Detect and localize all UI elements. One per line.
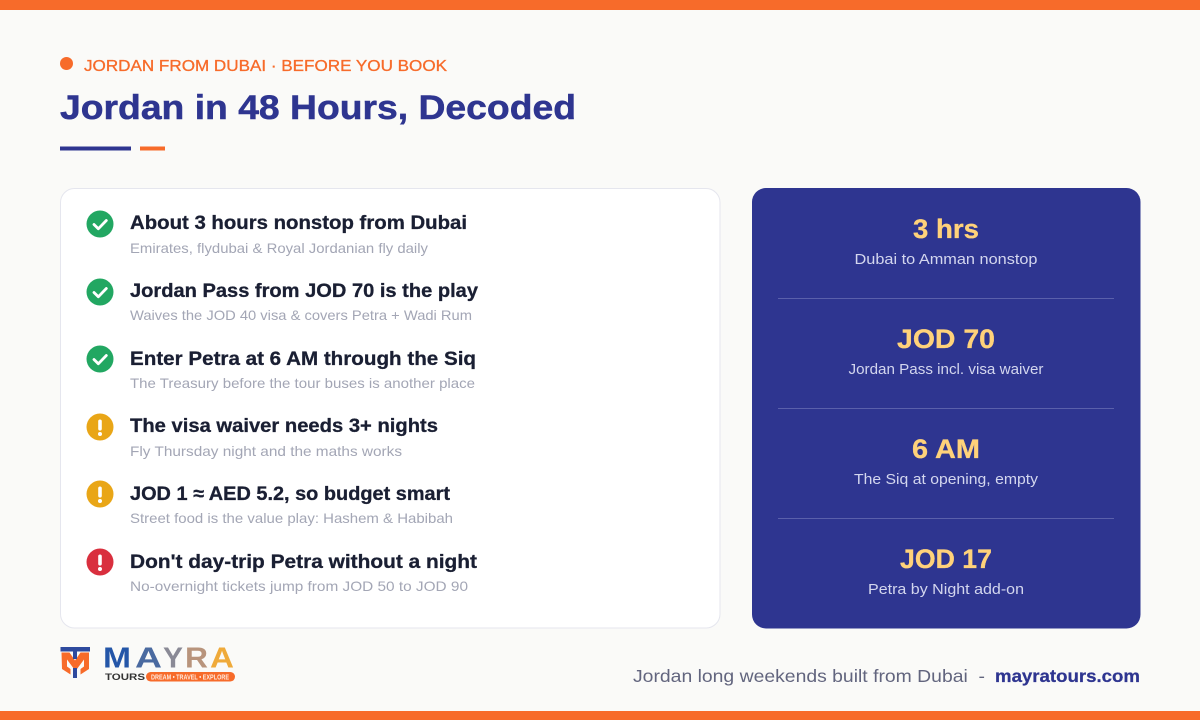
stat: 3 hrs	[854, 214, 1038, 268]
stat: 3 hrs: 3 hrs	[913, 214, 979, 244]
stat: 6 AM: 6 AM	[912, 434, 980, 464]
item: enter petra	[86, 346, 476, 391]
item: budget: JOD 1 ≈ AED 5.2, so budget smart	[130, 483, 451, 505]
item: about 3 hours	[86, 210, 467, 256]
stat: JOD 70: Jordan Pass incl. visa waiver	[848, 362, 1044, 378]
stat: JOD 17: JOD 17	[900, 544, 992, 574]
title: Jordan in 48 Hours, Decoded	[60, 89, 576, 127]
stat: 6 AM: The Siq at opening, empty	[854, 472, 1039, 488]
item: about 3 hours: Emirates, flydubai & Royal Jordanian fly daily	[130, 240, 428, 256]
item: visa waiver: The visa waiver needs 3+ nights	[130, 415, 438, 437]
stat: 6 AM	[854, 434, 1039, 488]
item: enter petra: The Treasury before the tour buses is another place	[130, 375, 475, 391]
item: jordan pass	[86, 278, 478, 323]
panel: checklist	[60, 188, 720, 628]
item: budget	[86, 480, 453, 526]
item: budget: Street food is the value play: Hashem & Habibah	[130, 510, 453, 526]
item: enter petra: Enter Petra at 6 AM through the Siq	[130, 348, 476, 370]
tagline	[105, 672, 235, 683]
icon: amber warning	[86, 414, 114, 440]
item: about 3 hours: About 3 hours nonstop from Dubai	[130, 212, 467, 234]
tagline: DREAM • TRAVEL • EXPLORE	[151, 674, 229, 682]
item: visa waiver: Fly Thursday night and the maths works	[130, 443, 402, 459]
item: day-trip warning: No-overnight tickets jump from JOD 50 to JOD 90	[130, 578, 468, 594]
item: jordan pass: Waives the JOD 40 visa & covers Petra + Wadi Rum	[130, 307, 472, 323]
stat: 3 hrs: Dubai to Amman nonstop	[854, 252, 1038, 268]
wordmark	[103, 642, 234, 674]
wordmark: A	[135, 642, 162, 674]
icon: amber warning	[86, 480, 114, 508]
title underline navy	[60, 146, 131, 150]
icon: green check	[86, 210, 114, 238]
icon: logo mark	[60, 647, 90, 678]
logo: Mayra Tours	[60, 642, 235, 683]
icon: red alert	[86, 548, 114, 576]
stat: JOD 70: JOD 70	[897, 324, 995, 354]
bottom accent bar	[0, 711, 1200, 720]
item: day-trip warning: Don't day-trip Petra without a night	[130, 551, 478, 573]
eyebrow: JORDAN FROM DUBAI · BEFORE YOU BOOK	[84, 58, 448, 75]
top accent bar	[0, 0, 1200, 10]
icon: green check	[86, 278, 114, 306]
stat: JOD 17	[868, 544, 1024, 598]
item: visa waiver	[86, 414, 438, 459]
icon: green check	[86, 346, 114, 372]
wordmark: Y	[163, 642, 183, 674]
eyebrow dot	[60, 57, 73, 70]
wordmark: R	[185, 642, 208, 674]
item: jordan pass: Jordan Pass from JOD 70 is the play	[130, 280, 478, 302]
footer tagline: Jordan long weekends built from Dubai -	[633, 666, 985, 686]
footer tagline: mayratours.com	[995, 666, 1140, 686]
tagline: TOURS	[105, 672, 145, 683]
wordmark: A	[210, 642, 234, 674]
title underline orange	[140, 146, 165, 150]
stat: JOD 70	[848, 324, 1044, 378]
header	[60, 57, 576, 150]
wordmark: M	[103, 642, 131, 674]
footer tagline	[633, 666, 1140, 686]
item: day-trip warning	[86, 548, 478, 594]
panel: key stats	[752, 188, 1140, 628]
stat: JOD 17: Petra by Night add-on	[868, 582, 1024, 598]
